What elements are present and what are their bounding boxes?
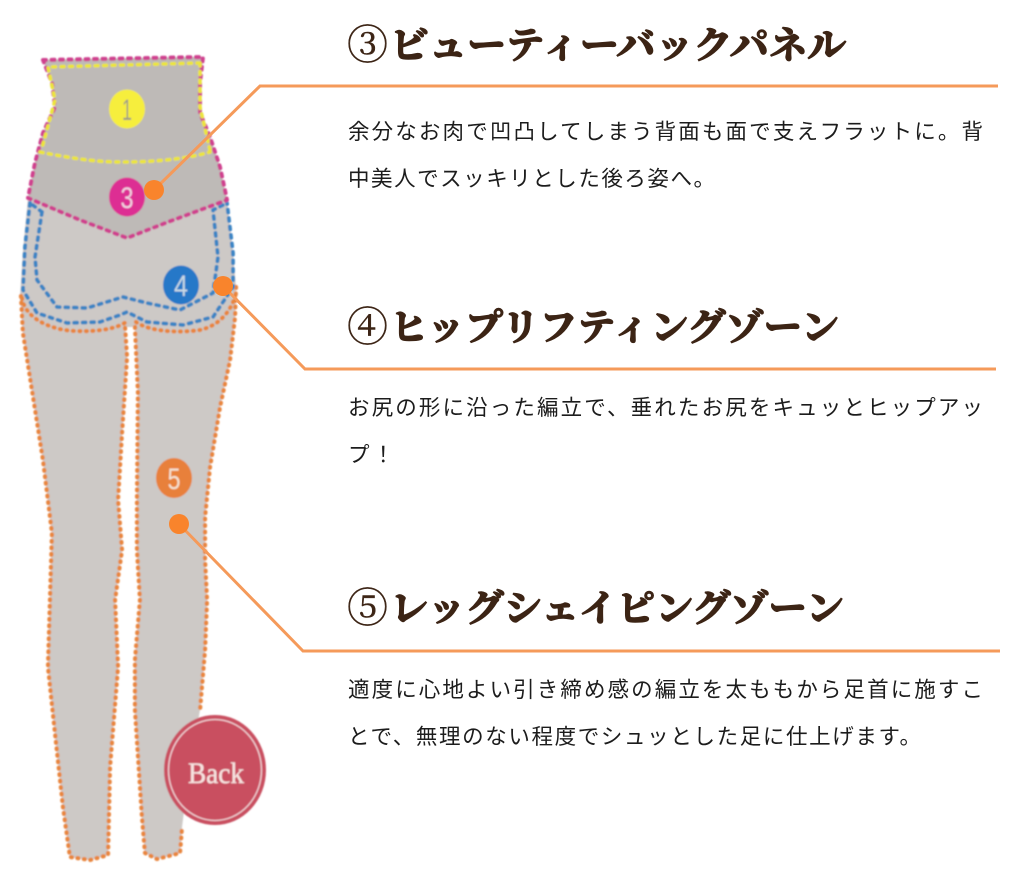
text: hip lifting zone [348, 396, 983, 467]
badge 3 [109, 178, 145, 216]
text: leg shaping zone: とで、無理のない程度でシュッとした足に仕上げます。 [348, 725, 921, 749]
heading: beauty back panel: ビューティーバックパネル [390, 26, 846, 67]
leader line: zone 3 [144, 86, 998, 200]
waistband shade [28, 57, 227, 238]
heading: leg shaping zone: レッグシェイピングゾーン [390, 588, 844, 630]
zone 1 outline: waistband [40, 63, 210, 162]
back button [164, 715, 266, 825]
text: hip lifting zone: お尻の形に沿った編立で、垂れたお尻をキュッとヒップアッ [348, 396, 983, 420]
text: leg shaping zone [348, 678, 983, 749]
badge 4: 4 [174, 270, 188, 303]
badge 5 [156, 458, 192, 498]
leader line: zone 5 [169, 514, 1000, 651]
text: beauty back panel: 中美人でスッキリとした後ろ姿へ。 [348, 167, 715, 191]
zone 4 outline: hips [23, 203, 233, 325]
leggings body [20, 57, 236, 860]
heading: hip lifting zone: ④ [347, 304, 388, 350]
heading: beauty back panel: ③ [347, 22, 388, 68]
badge 1 [109, 90, 145, 128]
heading: hip lifting zone: ヒップリフティングゾーン [390, 307, 839, 349]
text: hip lifting zone: プ！ [348, 443, 394, 467]
badge 4 [163, 266, 199, 304]
heading: leg shaping zone: ⑤ [347, 585, 388, 631]
text: beauty back panel: 余分なお肉で凹凸してしまう背面も面で支えフラットに。背 [348, 120, 983, 144]
text: leg shaping zone: 適度に心地よい引き締め感の編立を太ももから足首に施すこ [348, 678, 983, 702]
leggings illustration [20, 57, 266, 860]
back button: Back [188, 757, 244, 790]
leader line: zone 4 [213, 276, 996, 369]
badge 5: 5 [168, 463, 180, 496]
zone 5 outline: legs [21, 287, 236, 860]
badge 3: 3 [120, 182, 134, 215]
badge 1: 1 [122, 94, 132, 127]
zone 3 outline: back panel [28, 57, 227, 238]
text: beauty back panel [348, 120, 983, 191]
